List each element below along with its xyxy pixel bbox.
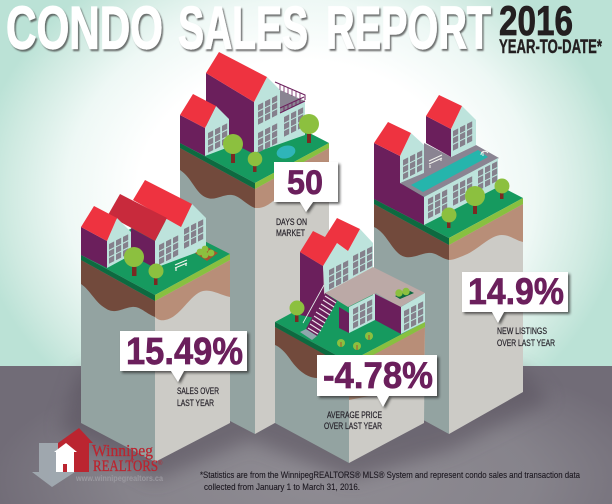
pillar: new listings (374, 160, 523, 434)
logo: Winnipeg Realtors (32, 428, 163, 487)
title (6, 0, 491, 62)
callout: 14.9%: 14.9% (468, 271, 564, 312)
label: average price: AVERAGE PRICE (327, 410, 382, 420)
label: sales over last year: SALES OVER (177, 386, 219, 396)
callout: 50 days on market: 50 (287, 164, 323, 202)
label: days on market: MARKET (276, 228, 305, 238)
callout: -4.78%: -4.78% (323, 355, 433, 396)
label: new listings: OVER LAST YEAR (497, 338, 555, 348)
logo: Winnipeg Realtors: ® (158, 460, 163, 467)
pillar: days on market (180, 105, 329, 434)
callout: 50 days on market (274, 162, 338, 212)
label: new listings: NEW LISTINGS (497, 326, 547, 336)
pillar: average price (275, 282, 425, 463)
label: days on market: DAYS ON (276, 217, 307, 227)
right building with pool (374, 95, 510, 228)
front building with stairs (290, 218, 425, 350)
label: sales over last year: LAST YEAR (177, 398, 214, 408)
logo: Winnipeg Realtors: Winnipeg (92, 441, 153, 460)
callout: 15.49%: 15.49% (126, 331, 243, 373)
ground floor (0, 366, 612, 504)
label: average price: OVER LAST YEAR (324, 421, 382, 431)
left building row (81, 180, 218, 285)
footnote: collected from January 1 to March 31, 2016. (204, 482, 360, 493)
background sky (0, 0, 612, 366)
pillar: sales over last year (81, 216, 230, 462)
logo: Winnipeg Realtors: REALTORS (93, 458, 158, 475)
logo: Winnipeg Realtors: www.winnipegrealtors.ca (75, 474, 163, 483)
center building with balcony (180, 52, 319, 172)
